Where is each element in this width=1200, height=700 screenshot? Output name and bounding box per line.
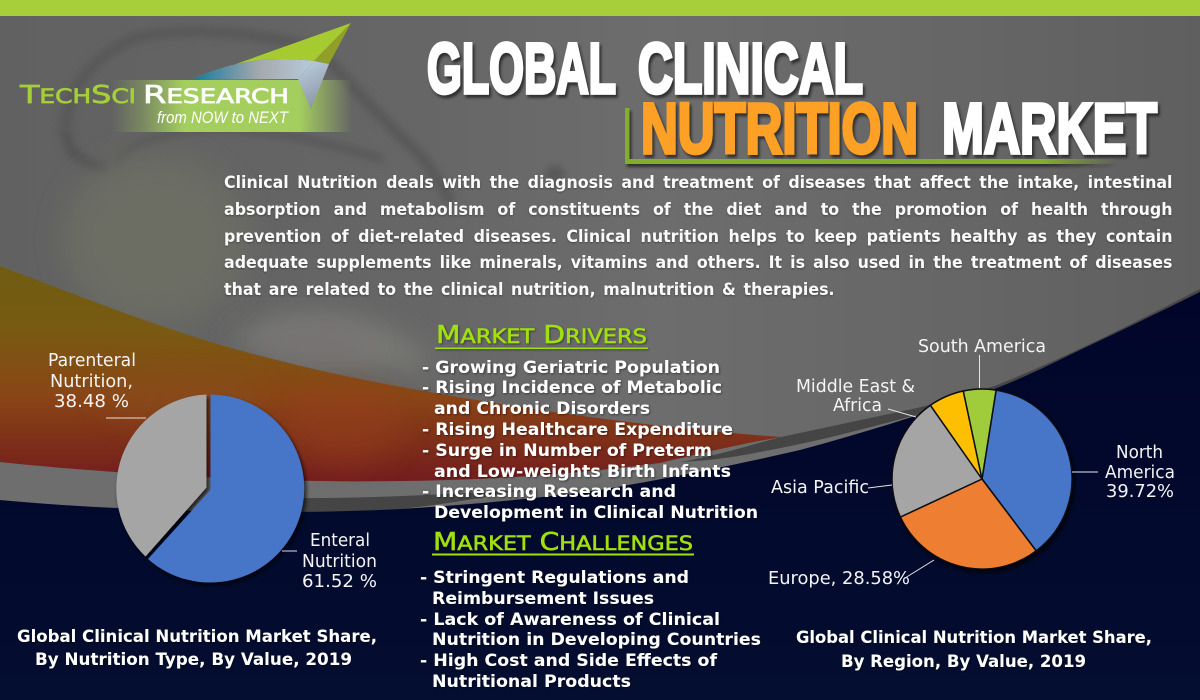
market challenges list: - Stringent Regulations and (420, 568, 689, 588)
right pie labels: Middle East & (796, 377, 915, 397)
left pie labels: Parenteral (48, 351, 136, 371)
logo arrow (191, 23, 351, 109)
navy lower background (0, 292, 1200, 700)
logo (19, 23, 352, 132)
market challenges list: - Lack of Awareness of Clinical (420, 610, 720, 630)
right pie slices (892, 389, 1072, 569)
market drivers list (422, 358, 758, 523)
text: absorption and metabolism of constituents of the diet and to the promotion of health through (224, 200, 1172, 219)
right chart caption (796, 628, 1152, 672)
title (427, 30, 1157, 169)
top green bar (0, 0, 1200, 16)
market challenges list: Nutrition in Developing Countries (432, 630, 761, 650)
market drivers list: - Growing Geriatric Population (422, 358, 720, 378)
market challenges list: - High Cost and Side Effects of (420, 651, 718, 671)
left pie labels: 38.48 % (54, 392, 129, 412)
right pie labels: 39.72% (1106, 482, 1174, 502)
market drivers list: and Low-weights Birth Infants (434, 462, 731, 482)
light grey swoosh strip (0, 291, 1200, 512)
market drivers list: and Chronic Disorders (434, 399, 650, 419)
market drivers list: - Rising Incidence of Metabolic (422, 378, 722, 398)
logo band (112, 80, 352, 132)
left chart caption: By Nutrition Type, By Value, 2019 (35, 650, 352, 670)
text: that are related to the clinical nutrition, malnutrition & therapies. (224, 280, 835, 299)
left pie labels: Nutrition, (50, 372, 133, 392)
title: CLINICAL (638, 30, 863, 109)
logo name: TECH SCI (19, 80, 136, 109)
left chart caption: Global Clinical Nutrition Market Share, (17, 627, 377, 647)
right pie labels: South America (918, 337, 1046, 357)
orange food band (0, 266, 781, 481)
title: NUTRITION (641, 90, 918, 169)
left chart caption (17, 627, 377, 670)
market challenges list: Nutritional Products (432, 672, 631, 692)
right chart caption: Global Clinical Nutrition Market Share, (796, 628, 1152, 648)
logo tagline: from NOW to NEXT (157, 108, 289, 127)
dark swoosh strip (280, 289, 1200, 512)
text: adequate supplements like minerals, vitamins and others. It is also used in the treatment of diseases (224, 253, 1172, 272)
background photo: stethoscope and apple (63, 32, 565, 370)
market drivers list: - Increasing Research and (422, 482, 676, 502)
market drivers list: - Rising Healthcare Expenditure (422, 420, 733, 440)
title: GLOBAL (427, 30, 616, 109)
right chart caption: By Region, By Value, 2019 (841, 652, 1086, 672)
left pie labels: Nutrition (302, 552, 377, 572)
left pie chart (48, 351, 377, 592)
market drivers list: Development in Clinical Nutrition (434, 503, 758, 523)
right pie labels (768, 337, 1175, 589)
left pie labels: Enteral (310, 531, 370, 551)
market challenges list (420, 568, 761, 692)
title frame (625, 108, 1116, 164)
right pie labels: North (1116, 443, 1163, 463)
right pie labels: Asia Pacific (771, 478, 869, 498)
logo: R ESEARCH (143, 80, 289, 109)
left pie labels: 61.52 % (302, 572, 377, 592)
market drivers list: - Surge in Number of Preterm (422, 441, 712, 461)
food glow (100, 365, 405, 465)
market drivers heading: MARKET DRIVERS (436, 320, 647, 349)
market challenges heading: MARKET CHALLENGES (433, 527, 693, 556)
right pie labels: Africa (833, 396, 882, 416)
right pie chart (768, 337, 1175, 589)
right pie labels: Europe, 28.58% (768, 569, 910, 589)
market challenges list: Reimbursement Issues (432, 589, 654, 609)
text: Clinical Nutrition deals with the diagnosis and treatment of diseases that affect the intake, intestinal (224, 173, 1172, 192)
left pie labels (48, 351, 377, 592)
left pie slices (116, 394, 304, 582)
text: prevention of diet-related diseases. Clinical nutrition helps to keep patients healthy as they contain (224, 227, 1172, 246)
intro paragraph (224, 173, 1172, 300)
right pie labels: America (1105, 463, 1175, 483)
